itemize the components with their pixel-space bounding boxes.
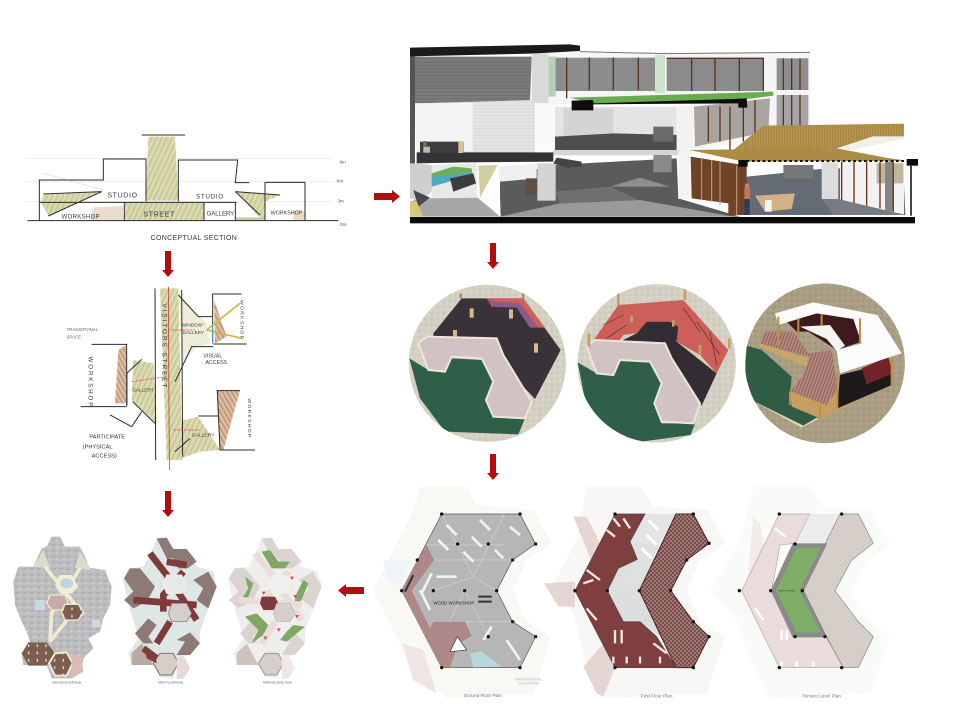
workshop shed bbox=[678, 153, 905, 215]
label: wood workshop: WOOD WORKSHOP bbox=[433, 600, 474, 605]
left gable wall bbox=[410, 44, 580, 172]
label: workshop left: WORKSHOP bbox=[62, 214, 100, 220]
timber roof bbox=[690, 124, 918, 216]
label: gallery right: GALLERY bbox=[192, 433, 215, 439]
caption: ground floor cluster: GROUND FLOOR PLAN bbox=[52, 681, 81, 685]
model: roof bbox=[745, 283, 905, 443]
arrow: plans to clusters bbox=[338, 584, 364, 597]
sketch: conceptual section bbox=[27, 135, 347, 242]
label: 9m level: 9m bbox=[339, 159, 346, 164]
arrow: section to sketch plan bbox=[162, 251, 174, 277]
arrow: sketch plan to clusters bbox=[162, 491, 174, 517]
caption: terrace level plan: Terrace Level Plan bbox=[802, 694, 841, 699]
arrow: section to model view bbox=[374, 190, 400, 203]
plan: terrace level bbox=[710, 487, 890, 699]
plan: ground floor bbox=[373, 487, 552, 698]
label: 3m level: 3m bbox=[337, 199, 344, 204]
green terrace slab bbox=[570, 92, 773, 104]
label: participate: (PHYSICAL bbox=[83, 444, 113, 450]
plan: first floor bbox=[544, 487, 725, 699]
first floor interior bbox=[535, 103, 693, 155]
cluster: terrace bbox=[228, 538, 322, 685]
caption: ground floor plan: Ground Floor Plan bbox=[464, 693, 502, 698]
label: visual access: VISUAL bbox=[203, 353, 222, 359]
label: green terrace: GREEN TERRACE bbox=[778, 589, 796, 592]
label: workshop bottom right: WORKSHOP bbox=[246, 398, 252, 439]
ground black band bbox=[410, 217, 915, 223]
upper glazing bbox=[548, 52, 810, 150]
caption: first floor cluster: FIRST FLOOR PLAN bbox=[158, 681, 183, 685]
label: gallery left: GALLERY bbox=[132, 388, 154, 393]
sketch: street plan bbox=[67, 287, 255, 470]
model: first floor bbox=[577, 284, 736, 445]
physical model photos bbox=[409, 283, 905, 445]
label: participate: PARTICIPATE bbox=[89, 434, 125, 440]
label: window gallery: GALLERY bbox=[183, 330, 204, 335]
caption: terrace cluster: TERRACE LEVEL PLAN bbox=[263, 681, 292, 685]
label: workshop right: WORKSHOP bbox=[271, 211, 303, 217]
label: visual access: ACCESS bbox=[205, 360, 228, 366]
label: transitional space: SPACE bbox=[67, 334, 81, 339]
label: participate: ACCESS) bbox=[92, 453, 117, 459]
label: window gallery: "WINDOW" bbox=[180, 323, 204, 328]
caption: first floor plan: First Floor Plan bbox=[641, 694, 673, 699]
section perspective render bbox=[410, 44, 918, 223]
cluster: ground floor bbox=[13, 537, 112, 685]
label: studio right: STUDIO bbox=[196, 193, 224, 200]
label: transitional space: TRANSITIONAL bbox=[67, 327, 98, 332]
cluster: first floor bbox=[123, 538, 217, 685]
label: workshop left: WORKSHOP bbox=[86, 357, 92, 408]
arrow: section to models bbox=[487, 243, 499, 269]
arrow: models to plans bbox=[487, 454, 499, 480]
label: studio left: STUDIO bbox=[107, 193, 138, 200]
label: raw material unloading: RAW MATERIAL bbox=[515, 677, 542, 681]
caption: conceptual section: CONCEPTUAL SECTION bbox=[151, 235, 237, 242]
label: 6m level: 6m bbox=[337, 179, 343, 184]
floor plans bbox=[373, 487, 890, 699]
ground floor bbox=[410, 155, 740, 217]
label: 0m level: 0m bbox=[340, 222, 347, 227]
label: gallery: GALLERY bbox=[207, 211, 234, 217]
label: raw material unloading: UNLOADING bbox=[518, 682, 540, 686]
model: ground floor bbox=[409, 285, 566, 442]
label: workshop top right: WORKSHOP bbox=[239, 300, 245, 340]
left terrace slab bbox=[417, 152, 553, 163]
hexagon cluster plans bbox=[13, 537, 322, 685]
label: street: STREET bbox=[143, 212, 175, 219]
label: visitors street: VISITORS STREET bbox=[161, 303, 168, 389]
